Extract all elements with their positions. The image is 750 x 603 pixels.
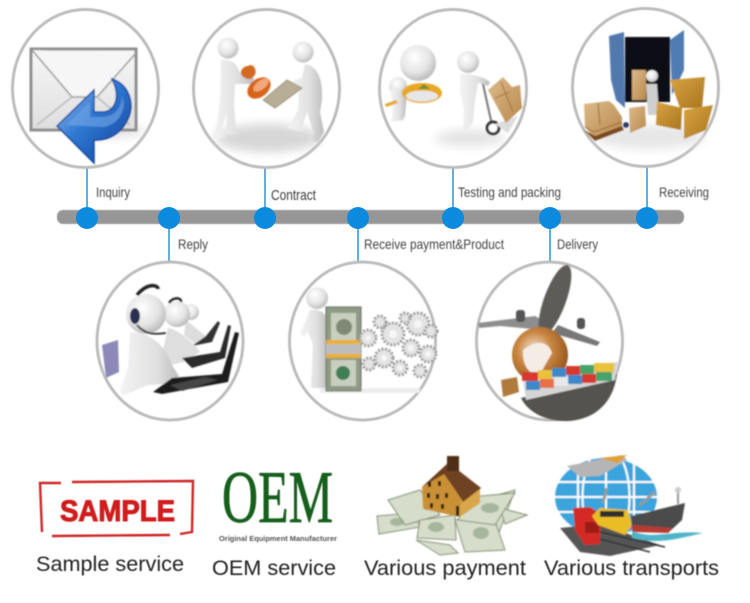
step: Receiving: [572, 8, 718, 229]
caption: Sample service: Sample service: [36, 553, 184, 576]
OEM service: [212, 457, 337, 580]
sample service: [36, 481, 193, 576]
icon: call-centre agents with headsets at laptops: [102, 286, 239, 396]
connector: Testing and packing: [452, 167, 454, 211]
label: Receive payment & Product: Receive payment&Product: [364, 236, 504, 252]
logo: OEM: OEM: [222, 457, 333, 539]
step: Receive payment & Product: [290, 207, 504, 420]
circle frame: Reply: [97, 262, 243, 420]
dot: Receiving: [636, 207, 658, 229]
dot: Receive payment & Product: [347, 207, 369, 229]
icon: house on pile of banknotes: [377, 456, 527, 555]
caption: OEM service: OEM service: [212, 557, 336, 580]
icon: airplane, globe and container ship: [478, 261, 618, 421]
various transports: [544, 455, 719, 580]
label: Receiving: Receiving: [659, 184, 709, 200]
dot: Inquiry: [76, 207, 98, 229]
dot: Reply: [158, 207, 180, 229]
circle frame: Testing and packing: [380, 10, 526, 168]
connector: Receive payment & Product: [357, 224, 359, 264]
label: Contract: Contract: [271, 187, 317, 204]
connector: Receiving: [646, 167, 648, 211]
step: Inquiry: [12, 10, 158, 229]
dot: Contract: [254, 207, 276, 229]
label: Delivery: Delivery: [557, 236, 598, 252]
connector: Delivery: [549, 224, 551, 264]
connector: Inquiry: [86, 167, 88, 211]
label: Inquiry: Inquiry: [96, 184, 130, 200]
step: Reply: [97, 207, 243, 420]
icon: shipping container with boxes and crates: [584, 30, 713, 149]
caption: Various payment: Various payment: [364, 557, 526, 580]
circle frame: Contract: [194, 10, 340, 168]
label: Reply: Reply: [178, 236, 208, 252]
dot: Delivery: [539, 207, 561, 229]
stamp: SAMPLE: SAMPLE: [60, 495, 175, 528]
icon: two figures exchanging a stamped contract: [212, 38, 324, 152]
subtitle: Original Equipment Manufacturer: Original Equipment Manufacturer: [219, 534, 337, 543]
circle frame: Inquiry: [12, 10, 158, 168]
connector: Reply: [168, 224, 170, 264]
circle frame: Receive payment & Product: [290, 262, 436, 420]
step: Contract: [194, 10, 340, 229]
icon: envelope with reply arrow: [31, 49, 145, 163]
circle frame: Delivery: [476, 262, 622, 420]
connector: Contract: [264, 167, 266, 211]
caption: Various transports: Various transports: [544, 557, 719, 580]
circle frame: Receiving: [572, 8, 718, 166]
timeline bar: [57, 210, 684, 224]
dot: Testing and packing: [442, 207, 464, 229]
stamp: SAMPLE: [40, 481, 193, 536]
step: Delivery: [476, 207, 622, 421]
various payment: [364, 456, 527, 580]
icon: inspector with magnifier and worker with hand truck: [385, 45, 522, 146]
step: Testing and packing: [380, 10, 561, 229]
label: Testing and packing: Testing and packing: [458, 184, 561, 200]
icon: globe with plane, truck, train and ship: [553, 455, 703, 556]
icon: figure with banknote stack and gears: [300, 287, 437, 393]
